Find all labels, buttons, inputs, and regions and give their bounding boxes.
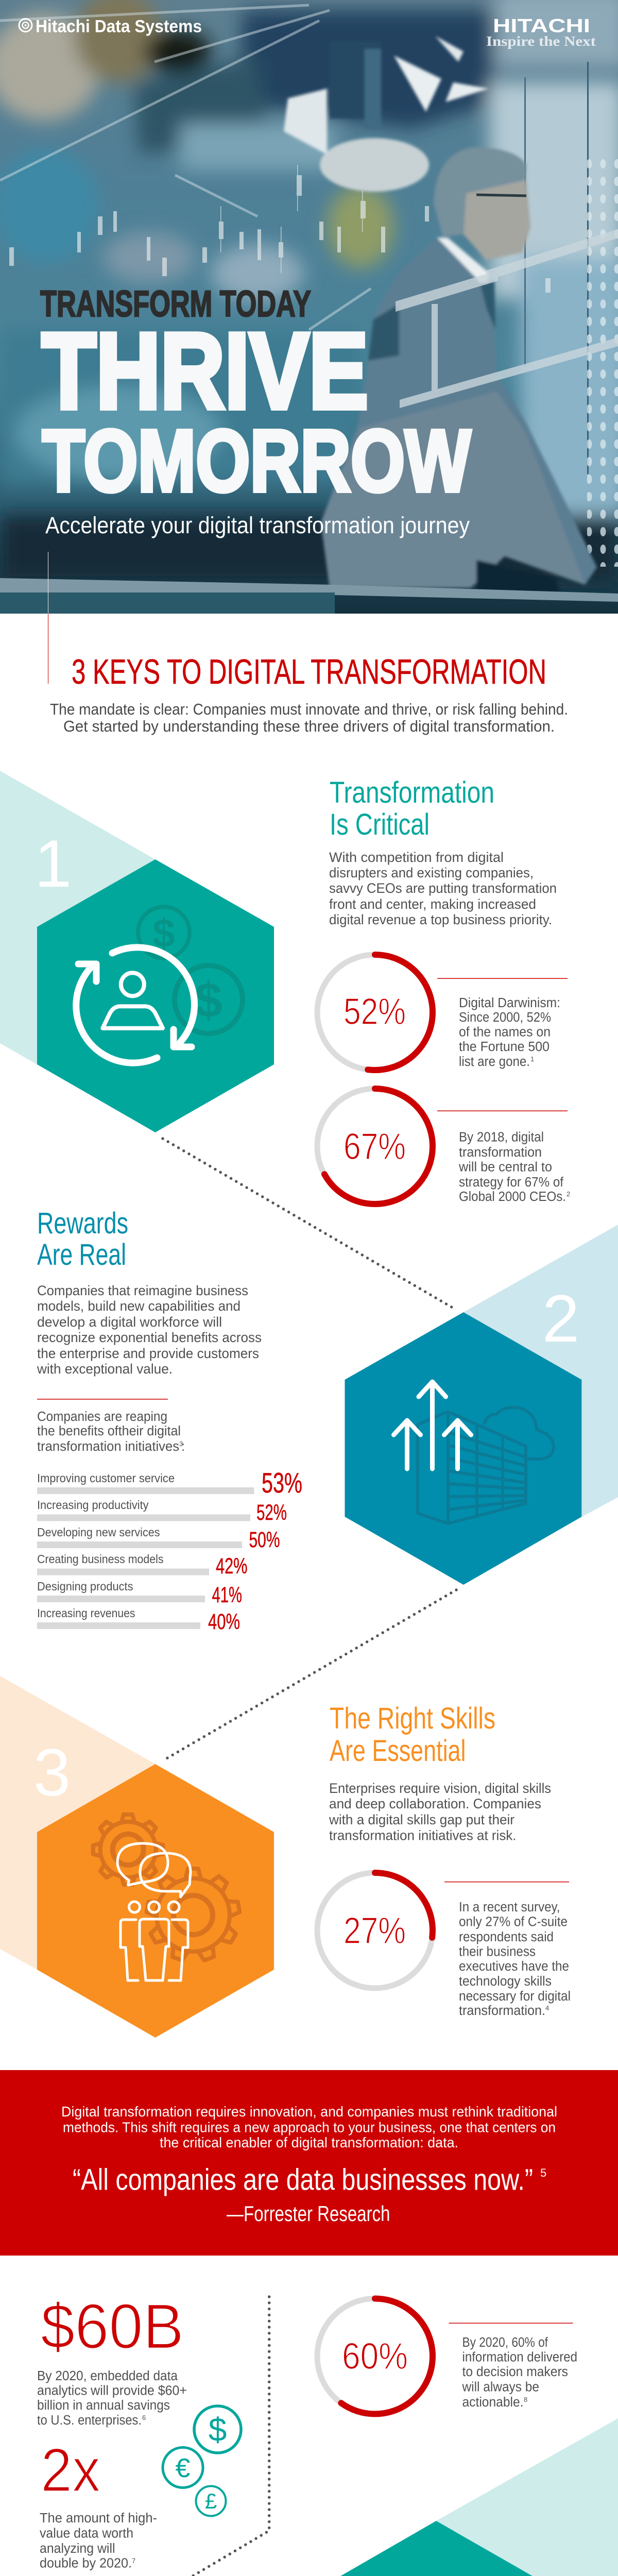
- dotted connector: [129, 2297, 269, 2576]
- heading: [330, 1702, 495, 1768]
- logo: Hitachi Inspire the Next (hero): HITACHI: [493, 15, 590, 36]
- icon: currency coins: €: [176, 2453, 191, 2483]
- bar chart: 53%: [262, 1467, 302, 1499]
- hero photo background: [0, 0, 618, 614]
- quote: 5: [540, 2166, 546, 2179]
- hero kicker: Transform Today: TRANSFORM TODAY: [40, 284, 311, 325]
- body text: [37, 1283, 262, 1377]
- icon: currency coins: £: [205, 2489, 217, 2513]
- body text: With competition from digital: [329, 850, 504, 865]
- stat: $60B: analytics will provide $60+: [37, 2383, 187, 2398]
- panel: transformation is critical: [317, 776, 570, 1204]
- hero title: Thrive: THRIVE: [42, 311, 368, 431]
- donut: 27%: 27%: [344, 1910, 406, 1952]
- number 3: 3: [33, 1735, 71, 1810]
- band text: the critical enabler of digital transformation: data.: [160, 2134, 458, 2150]
- number 2: 2: [542, 1281, 579, 1356]
- stat text: by 2018: will be central to: [458, 1160, 552, 1175]
- body text: with a digital skills gap put their: [329, 1812, 514, 1827]
- stat text: Digital Darwinism: Since 2000, 52%: [459, 1010, 551, 1025]
- bar chart: Increasing productivity: [37, 1498, 149, 1512]
- stat text: survey: their business: [459, 1944, 536, 1959]
- body text: [329, 1781, 551, 1843]
- band text: Digital transformation requires innovation, and companies must rethink traditional: [61, 2104, 557, 2120]
- panel: key 2 hexagon: [345, 1225, 618, 1585]
- heading: Are Real: [37, 1238, 126, 1272]
- stat: $60B: 6: [142, 2414, 146, 2421]
- dotted connector 2 to 3: [167, 1590, 456, 1758]
- stat text: by 2018: Global 2000 CEOs.: [459, 1190, 566, 1204]
- bar chart intro: 3: [179, 1440, 183, 1448]
- stat text: by 2018: By 2018, digital: [459, 1130, 544, 1145]
- hero title: Tomorrow: TOMORROW: [42, 412, 471, 510]
- stat text: survey: respondents said: [459, 1930, 554, 1944]
- quote: [73, 2163, 546, 2226]
- icon: up arrows: [393, 1382, 471, 1469]
- stat text: Digital Darwinism: list are gone.: [459, 1055, 530, 1069]
- stat: 2x: double by 2020.: [40, 2556, 132, 2571]
- candlestick marks: [9, 165, 551, 293]
- heading: Are Essential: [330, 1734, 466, 1768]
- number 1: 1: [35, 826, 72, 901]
- body text: digital revenue a top business priority.: [329, 912, 552, 927]
- stat text: 60%: will always be: [462, 2380, 539, 2395]
- stat text: Digital Darwinism: [437, 978, 568, 1069]
- panel: rewards are real: [37, 1207, 302, 1634]
- heading: [37, 1207, 128, 1272]
- donut: 60%: 60%: [342, 2336, 408, 2377]
- stat text: 60%: By 2020, 60% of: [462, 2335, 548, 2350]
- bar chart: Designing products: [37, 1580, 133, 1593]
- body text: savvy CEOs are putting transformation: [329, 880, 557, 896]
- donut: 27%: [317, 1873, 433, 1988]
- body text: and deep collaboration. Companies: [329, 1796, 541, 1811]
- icon: gears: [93, 1815, 240, 1961]
- heading: The Right Skills: [330, 1702, 495, 1735]
- body text: recognize exponential benefits across: [37, 1330, 262, 1345]
- bar chart: 40%: [208, 1609, 240, 1634]
- body text: Companies that reimagine business: [37, 1283, 248, 1298]
- stat: $60B: [37, 2292, 187, 2428]
- stat text: survey: transformation.: [459, 2004, 545, 2018]
- logo: Hitachi Data Systems (hero): Hitachi Data Systems: [36, 16, 202, 36]
- bar chart: 41%: [212, 1583, 242, 1607]
- bar chart intro: the benefits oftheir digital: [37, 1424, 181, 1438]
- stat text: survey: In a recent survey,: [459, 1900, 560, 1914]
- stat text: 60%: information delivered: [462, 2350, 577, 2365]
- band text: methods. This shift requires a new approach to your business, one that centers on: [63, 2120, 556, 2135]
- stat: 2x: The amount of high-: [40, 2511, 157, 2526]
- stat text: by 2018: [437, 1111, 570, 1204]
- panel: key 1 hexagon: [0, 771, 274, 1132]
- icon: people talking: [117, 1843, 191, 1980]
- stat: 2x: value data worth: [40, 2527, 133, 2541]
- heading: Rewards: [37, 1207, 128, 1240]
- bar chart: Increasing revenues: [37, 1606, 135, 1620]
- stat text: 60%: to decision makers: [462, 2365, 568, 2379]
- stat text: 60%: 8: [524, 2396, 527, 2403]
- body text: front and center, making increased: [329, 896, 536, 912]
- intro text: [50, 700, 568, 735]
- panel: data hexagon: [298, 2418, 618, 2576]
- stat: 2x: [40, 2436, 157, 2571]
- band text: [61, 2104, 557, 2150]
- stat text: survey: necessary for digital: [459, 1989, 571, 2004]
- logo: Hitachi Inspire the Next (hero): Inspire the Next: [486, 33, 596, 49]
- donut: 52%: 52%: [344, 991, 406, 1032]
- panel: the right skills: [317, 1702, 571, 2018]
- bar chart: 42%: [216, 1554, 247, 1579]
- bar chart intro: Companies are reaping: [37, 1410, 167, 1424]
- bar chart: Developing new services: [37, 1526, 160, 1539]
- stat text: survey: 4: [545, 2004, 549, 2012]
- intro text: Get started by understanding these three drivers of digital transformation.: [63, 717, 555, 735]
- stat text: by 2018: transformation: [459, 1145, 542, 1160]
- icon: dollar coins: $: [195, 973, 222, 1028]
- bar chart: Creating business models: [37, 1552, 164, 1566]
- stat: 2x: 2x: [41, 2436, 100, 2505]
- bar chart: Improving customer service: [37, 1471, 175, 1485]
- quote: “All companies are data businesses now.”: [73, 2163, 533, 2197]
- stat text: survey: executives have the: [459, 1959, 569, 1974]
- icon: person in cycle: [76, 947, 195, 1063]
- icon: currency coins: [163, 2406, 241, 2516]
- stat text: survey: only 27% of C-suite: [459, 1914, 568, 1929]
- body text: transformation initiatives at risk.: [329, 1828, 516, 1843]
- body text: Enterprises require vision, digital skills: [329, 1781, 551, 1796]
- intro text: The mandate is clear: Companies must innovate and thrive, or risk falling behind.: [50, 700, 568, 718]
- body text: disrupters and existing companies,: [329, 865, 534, 880]
- bar chart intro: transformation initiatives: [37, 1439, 179, 1454]
- bar chart: 50%: [249, 1528, 280, 1552]
- panel: red quote band: [0, 2070, 618, 2256]
- logo: Hitachi Inspire the Next (hero): [486, 15, 596, 49]
- stat: 2x: analyzing will: [40, 2541, 115, 2556]
- icon: dollar coins: [138, 907, 243, 1033]
- icon: dollar coins: $: [152, 910, 175, 956]
- bar chart: 52%: [256, 1500, 287, 1525]
- stat text: 60%: actionable.: [462, 2395, 523, 2410]
- donut: 52%: [317, 955, 433, 1070]
- stat: 2x: 7: [132, 2557, 135, 2565]
- panel: key 3 hexagon: [0, 1676, 274, 2038]
- dotted connector 1 to 2: [163, 1139, 452, 1308]
- donut: 67%: [317, 1089, 433, 1204]
- bar chart: [37, 1467, 302, 1634]
- heading: [330, 776, 494, 841]
- stat text: survey: [444, 1882, 571, 2018]
- body text: models, build new capabilities and: [37, 1298, 241, 1314]
- icon: currency coins: $: [209, 2411, 227, 2448]
- donut: 60%: [317, 2299, 433, 2414]
- bar chart intro: [37, 1410, 185, 1454]
- stat text: Digital Darwinism: Digital Darwinism:: [459, 996, 560, 1010]
- stat text: Digital Darwinism: of the names on: [459, 1025, 551, 1040]
- body text: with exceptional value.: [37, 1361, 173, 1377]
- heading: Is Critical: [330, 808, 430, 841]
- stat text: Digital Darwinism: 1: [530, 1055, 534, 1063]
- stat text: by 2018: strategy for 67% of: [459, 1175, 564, 1190]
- donut: 67%: 67%: [344, 1126, 406, 1167]
- stat: $60B: billion in annual savings: [37, 2398, 170, 2413]
- stat text: Digital Darwinism: the Fortune 500: [459, 1040, 550, 1054]
- hero subtitle: Accelerate your digital transformation journey: [45, 512, 470, 538]
- stat: $60B: to U.S. enterprises.: [37, 2413, 142, 2428]
- stat: $60B: $60B: [41, 2292, 184, 2362]
- icon: building and cloud: [418, 1408, 554, 1523]
- bar chart intro: :: [181, 1439, 185, 1454]
- stat: $60B: By 2020, embedded data: [37, 2369, 178, 2383]
- quote: —Forrester Research: [227, 2201, 390, 2226]
- stat text: 60%: [449, 2323, 577, 2410]
- heading: Transformation: [330, 776, 494, 809]
- body text: [329, 850, 557, 927]
- stat text: by 2018: 2: [566, 1190, 570, 1198]
- body text: develop a digital workforce will: [37, 1314, 222, 1330]
- stat text: survey: technology skills: [459, 1974, 552, 1989]
- body text: the enterprise and provide customers: [37, 1346, 259, 1361]
